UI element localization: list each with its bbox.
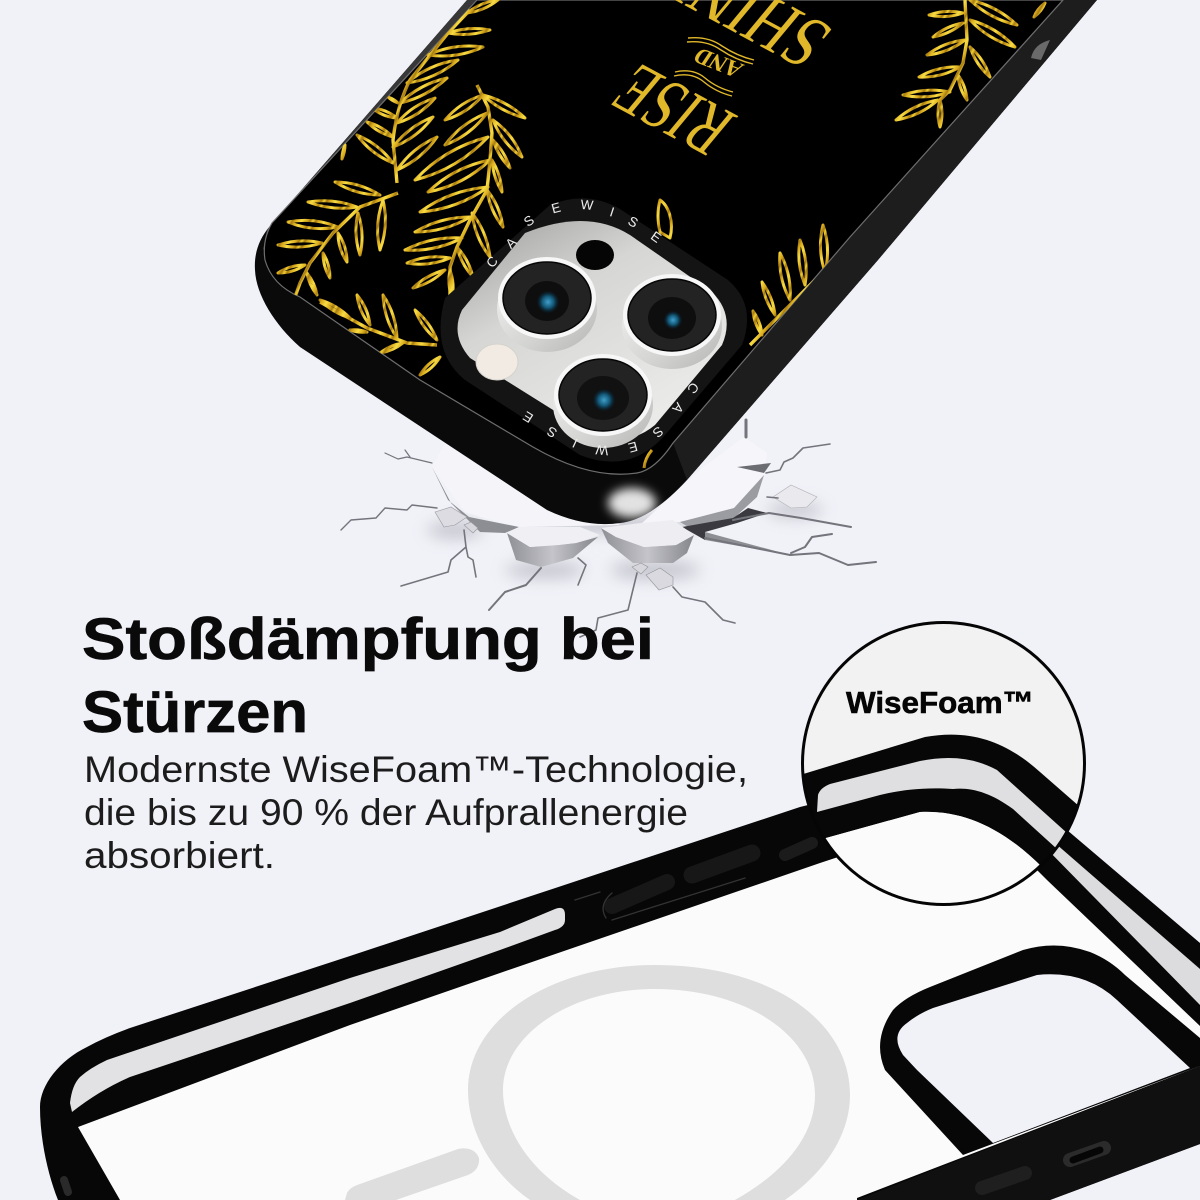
heading	[82, 607, 654, 745]
magnified bumper detail	[804, 734, 1077, 903]
lens 2	[622, 274, 722, 369]
crack lines	[341, 420, 876, 637]
small rocks	[435, 485, 817, 590]
casewise ring lettering	[483, 197, 702, 458]
slogan: rise and shine: AND	[689, 42, 748, 82]
fern C	[278, 182, 398, 297]
body text: Modernste WiseFoam™-Technologie,	[84, 749, 748, 790]
lower bumper band	[857, 1066, 1200, 1200]
magnifier label: WiseFoam™	[846, 685, 1034, 720]
casewise ring lettering: I	[608, 204, 616, 220]
magsafe ring	[468, 965, 850, 1200]
heading: Stürzen	[82, 680, 308, 745]
rock B	[601, 520, 694, 563]
casewise ring lettering: S	[650, 423, 666, 441]
camera island	[440, 197, 747, 462]
flash	[476, 344, 518, 380]
right plate	[640, 437, 771, 528]
casewise ring lettering: A	[503, 235, 519, 251]
gold ferns	[278, 0, 1045, 468]
heading: Stoßdämpfung bei	[82, 607, 654, 672]
casewise ring lettering: W	[580, 197, 594, 213]
casewise ring lettering: A	[669, 400, 687, 416]
casewise ring lettering: S	[625, 213, 641, 231]
casewise ring lettering: E	[550, 200, 562, 216]
foam strip right	[1040, 830, 1200, 1005]
casewise ring lettering: S	[544, 423, 560, 441]
fern F	[896, 0, 1045, 127]
body text	[84, 749, 748, 876]
clear case with black bumper (bottom)	[40, 768, 1200, 1200]
back panel	[264, 0, 1063, 474]
body text: absorbiert.	[84, 835, 275, 876]
casewise ring lettering: E	[648, 228, 664, 246]
casewise ring lettering: S	[521, 212, 537, 230]
casewise ring lettering: E	[627, 439, 639, 455]
black bumper	[40, 768, 1200, 1200]
phone bumper	[255, 0, 1097, 524]
casewise ring lettering: W	[595, 442, 609, 458]
loose leaf pieces	[342, 145, 671, 468]
crack shadows	[427, 503, 823, 579]
casewise ring lettering: C	[684, 380, 702, 397]
body text: die bis zu 90 % der Aufprallenergie	[84, 792, 688, 833]
lens 3	[553, 354, 653, 448]
side buttons	[64, 843, 1104, 1192]
lidar hole	[576, 240, 614, 270]
slogan: rise and shine: RISE	[595, 50, 751, 171]
rock A	[507, 527, 600, 567]
fern E	[748, 224, 830, 346]
phone with gold fern case (top)	[255, 0, 1097, 524]
fern B	[405, 85, 525, 300]
dark gap	[682, 508, 767, 540]
slogan: rise and shine	[595, 0, 847, 171]
casewise ring lettering: I	[570, 435, 580, 451]
foam strip left	[70, 908, 565, 1112]
lens 1	[497, 257, 597, 352]
magnifier callout: WiseFoam	[790, 622, 1095, 915]
illustration: cracked ground under the phone	[341, 420, 876, 637]
bumper side shading and gloss	[263, 0, 1097, 518]
left plate	[432, 440, 620, 533]
fern D	[320, 295, 440, 375]
clear back	[78, 818, 1200, 1200]
casewise ring lettering: E	[520, 408, 536, 426]
magsafe alignment pill	[345, 1148, 479, 1200]
magnifier outline	[802, 622, 1084, 904]
right flat plate edge	[705, 532, 790, 555]
casewise ring lettering: C	[483, 253, 501, 271]
fern A	[357, 0, 498, 183]
camera cutout	[880, 945, 1200, 1155]
